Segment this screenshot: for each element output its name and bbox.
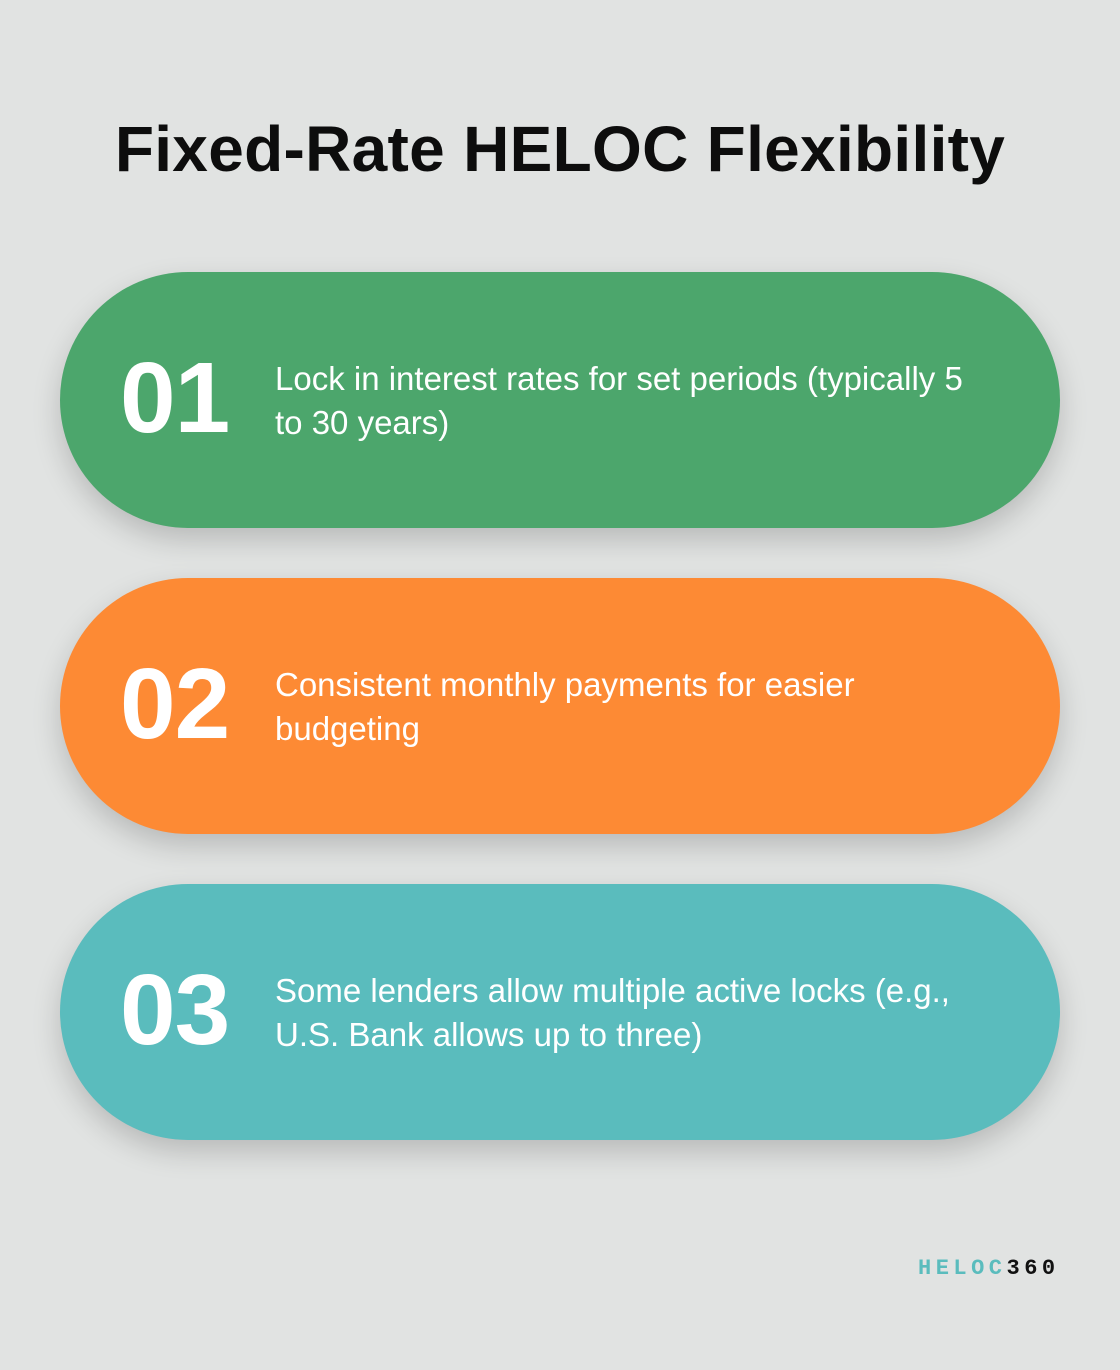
text 02: budgeting xyxy=(275,710,420,747)
logo: HELOC360 xyxy=(918,1256,1060,1281)
text 01 xyxy=(275,360,963,441)
text 01: Lock in interest rates for set periods (typically 5 xyxy=(275,360,963,397)
text 03: U.S. Bank allows up to three) xyxy=(275,1016,702,1053)
text 02: Consistent monthly payments for easier xyxy=(275,666,855,703)
number 03: 03 xyxy=(120,954,229,1066)
text 03 xyxy=(275,972,950,1053)
title: Fixed-Rate HELOC Flexibility xyxy=(115,113,1005,185)
panel: item 03 xyxy=(60,884,1060,1140)
panel: item 01 xyxy=(60,272,1060,528)
text 03: Some lenders allow multiple active locks (e.g., xyxy=(275,972,950,1009)
text 01: to 30 years) xyxy=(275,404,449,441)
number 02: 02 xyxy=(120,648,229,760)
panel: item 02 xyxy=(60,578,1060,834)
number 01: 01 xyxy=(120,342,229,454)
text 02 xyxy=(275,666,855,747)
